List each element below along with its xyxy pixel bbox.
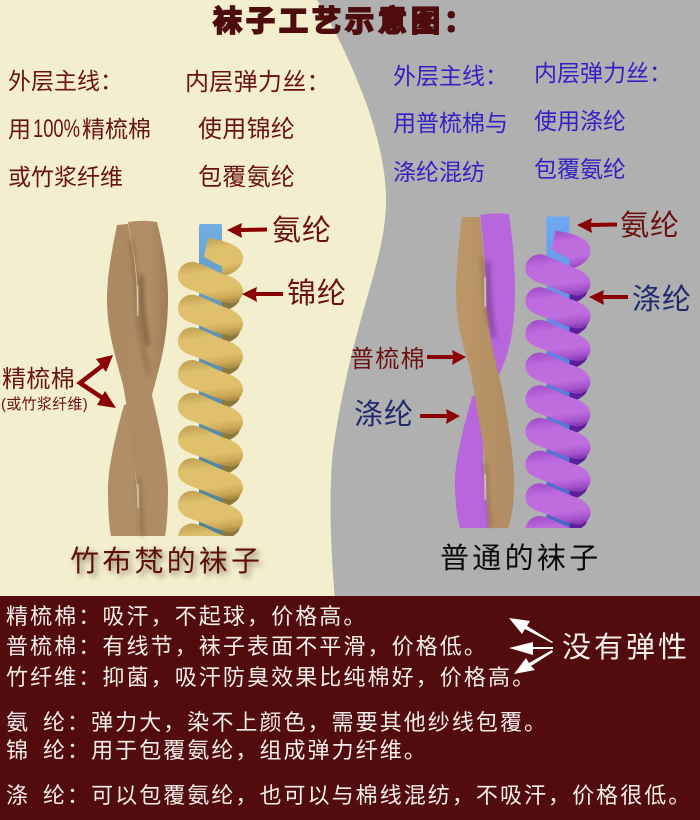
text block: no-elasticity fibres: 竹纤维：抑菌，吸汗防臭效果比纯棉好，价格高。 (6, 665, 536, 690)
caption: bamboo socks: 竹布梵的袜子 (70, 545, 263, 578)
text block: no-elasticity fibres (6, 604, 536, 690)
diagram: right coiled yarn around blue core (526, 216, 590, 557)
text block: polyester notes: 纶：可以包覆氨纶，也可以与棉线混纺，不吸汗，价格很低。 (43, 783, 692, 808)
label: spandex left: 氨纶 (272, 214, 332, 247)
arrow: double arrow to twisted yarn (80, 355, 116, 408)
text block: right outer yarn: 用普梳棉与 (393, 110, 508, 136)
title: 袜子工艺示意图： (213, 5, 477, 38)
arrow: to spandex left (227, 223, 267, 238)
arrow: to polyester strand (420, 409, 460, 424)
panel: cream background (0, 0, 700, 600)
text block: right inner elastic yarn: 内层弹力丝： (534, 60, 672, 86)
text block: right inner elastic yarn: 包覆氨纶 (534, 156, 626, 182)
label: polyester left of twist: 涤纶 (354, 398, 414, 431)
text block: spandex and nylon notes: 纶：弹力大，染不上颜色，需要其他纱线包覆。 (43, 710, 548, 735)
text block: right inner elastic yarn (534, 60, 672, 182)
callout: no elasticity: 没有弹性 (562, 631, 690, 664)
text block: left outer yarn: 外层主线： (8, 68, 123, 94)
panel: dark red notes (0, 596, 700, 820)
diagram: left twisted yarn (107, 221, 168, 536)
text block: left outer yarn: 或竹浆纤维 (8, 164, 123, 190)
text block: left inner elastic yarn (185, 69, 331, 191)
text block: spandex and nylon notes (6, 710, 548, 763)
text block: left inner elastic yarn: 内层弹力丝： (185, 69, 331, 96)
panel: grey background (317, 0, 700, 600)
caption: ordinary socks: 普通的袜子 (440, 542, 602, 575)
text block: spandex and nylon notes: 氨 (6, 710, 30, 735)
label: combed cotton: 精梳棉 (2, 366, 75, 393)
text block: spandex and nylon notes: 纶：用于包覆氨纶，组成弹力纤维。 (43, 738, 428, 763)
text block: right outer yarn (393, 63, 508, 185)
text block: no-elasticity fibres: 精梳棉：吸汗，不起球，价格高。 (6, 604, 368, 629)
label: nylon: 锦纶 (287, 277, 347, 310)
text block: left inner elastic yarn: 包覆氨纶 (198, 164, 295, 191)
arrow: to spandex right (577, 218, 617, 233)
arrows: pointing to the three fibre lines (509, 618, 553, 674)
text block: left inner elastic yarn: 使用锦纶 (198, 116, 295, 143)
text block: right outer yarn: 涤纶混纺 (393, 159, 485, 185)
text block: right outer yarn: 外层主线： (393, 63, 508, 89)
diagram: left coiled yarn around blue core (178, 224, 243, 565)
text block: left outer yarn (8, 68, 151, 190)
arrow: to nylon (242, 287, 283, 302)
text block: left outer yarn: 精梳棉 (82, 116, 151, 142)
diagram: right twisted yarn (455, 213, 515, 528)
arrow: to polyester right (589, 290, 628, 305)
text block: left outer yarn: 100% (33, 115, 80, 143)
label: carded cotton: 普梳棉 (350, 346, 426, 373)
text block: no-elasticity fibres: 普梳棉：有线节，袜子表面不平滑，价格低。 (6, 634, 488, 659)
arrow: to carded cotton (427, 350, 466, 365)
text block: right inner elastic yarn: 使用涤纶 (534, 108, 626, 134)
text block: polyester notes: 涤 (6, 783, 30, 808)
text block: left outer yarn: 用 (8, 116, 31, 142)
text block: spandex and nylon notes: 锦 (6, 738, 30, 763)
label: polyester right: 涤纶 (632, 283, 692, 316)
label: spandex right: 氨纶 (620, 209, 680, 242)
label: or bamboo fibre: (或竹浆纤维) (1, 395, 88, 413)
